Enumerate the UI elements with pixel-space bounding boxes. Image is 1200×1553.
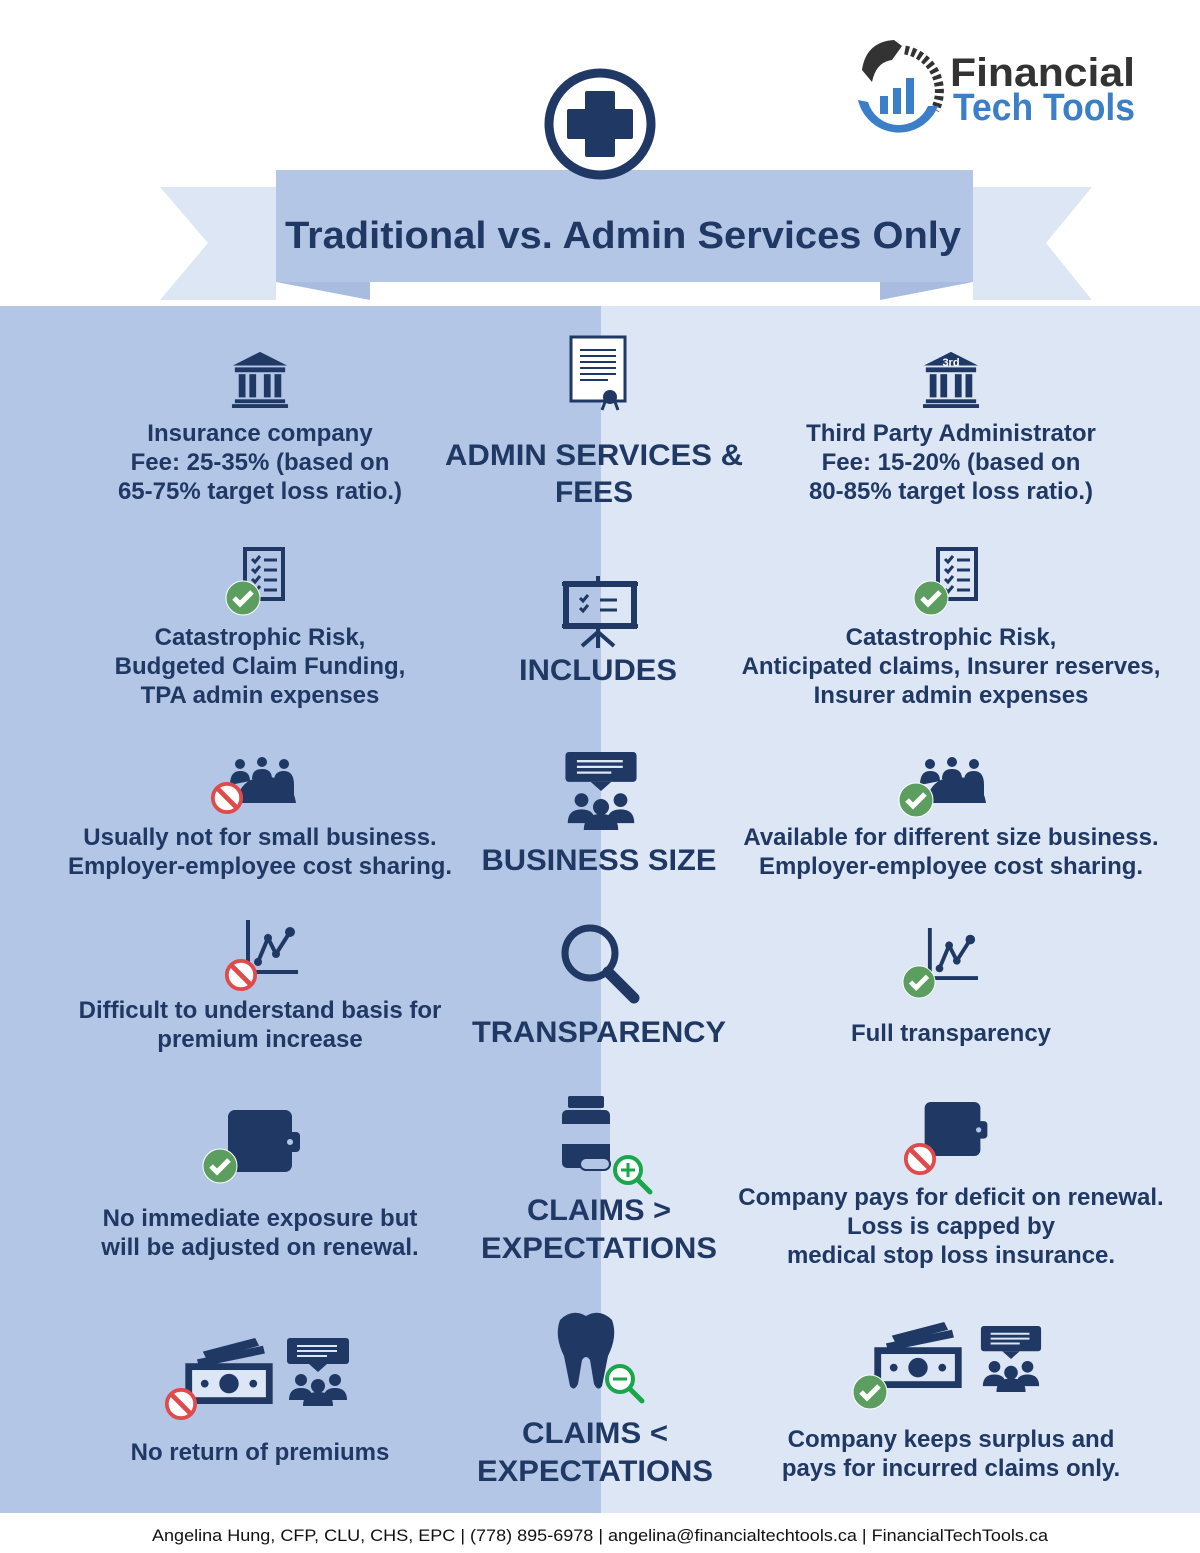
row 5: claims > expectations: Loss is capped by (847, 1213, 1056, 1240)
row 4: transparency (79, 920, 1052, 1053)
row 1: admin services & fees: Fee: 25-35% (based on (131, 449, 389, 476)
row 3: business size: Employer-employee cost sharing. (68, 853, 452, 880)
row 1: admin services & fees: FEES (555, 476, 633, 509)
row 2: includes (115, 549, 1160, 709)
footer: Angelina Hung, CFP, CLU, CHS, EPC | (778) 895-6978 | angelina@financialtechtools.ca | FinancialTechTools.ca (152, 1526, 1049, 1545)
logo (858, 40, 1135, 133)
row 4: transparency: Difficult to understand basis for (79, 997, 441, 1024)
row 6: claims < expectations: No return of premiums (131, 1439, 389, 1466)
row 5: claims > expectations (100, 1096, 1164, 1269)
row 2: includes: Budgeted Claim Funding, (115, 653, 405, 680)
row 3: business size: Available for different size business. (743, 824, 1159, 851)
row 6: claims < expectations: EXPECTATIONS (477, 1455, 713, 1488)
icon: medical plus (549, 73, 651, 175)
row 2: includes: Insurer admin expenses (814, 682, 1088, 709)
row 3: business size (68, 752, 1159, 880)
logo: Financial (950, 51, 1135, 95)
row 4: transparency: premium increase (157, 1026, 363, 1053)
row 1: admin services & fees (118, 337, 1096, 509)
row 3: business size: Usually not for small business. (83, 824, 437, 851)
row 1: admin services & fees: 65-75% target loss ratio.) (118, 478, 402, 505)
title ribbon (160, 170, 1092, 300)
row 4: transparency: TRANSPARENCY (472, 1016, 726, 1049)
logo: Tech Tools (953, 87, 1135, 129)
panel backgrounds (0, 306, 1200, 1513)
row 5: claims > expectations: No immediate exposure but (103, 1205, 417, 1232)
row 4: transparency: Full transparency (851, 1020, 1052, 1047)
row 2: includes: Catastrophic Risk, (155, 624, 365, 651)
row 3: business size: BUSINESS SIZE (482, 844, 716, 877)
title ribbon: Traditional vs. Admin Services Only (285, 215, 961, 257)
row 5: claims > expectations: will be adjusted on renewal. (100, 1234, 419, 1261)
row 2: includes: Anticipated claims, Insurer reserves, (742, 653, 1160, 680)
row 6: claims < expectations: CLAIMS < (522, 1417, 668, 1450)
row 6: claims < expectations: pays for incurred claims only. (782, 1455, 1120, 1482)
row 1: admin services & fees: Insurance company (147, 420, 373, 447)
row 6: claims < expectations: Company keeps surplus and (788, 1426, 1114, 1453)
row 5: claims > expectations: CLAIMS > (527, 1194, 671, 1227)
row 1: admin services & fees: Fee: 15-20% (based on (822, 449, 1080, 476)
row 5: claims > expectations: medical stop loss insurance. (787, 1242, 1115, 1269)
row 2: includes: TPA admin expenses (141, 682, 379, 709)
row 6: claims < expectations (131, 1313, 1120, 1488)
row 2: includes: INCLUDES (519, 654, 677, 687)
row 3: business size: Employer-employee cost sharing. (759, 853, 1143, 880)
row 1: admin services & fees: 3rd (942, 357, 960, 369)
row 1: admin services & fees: ADMIN SERVICES & (445, 439, 743, 472)
row 1: admin services & fees: Third Party Administrator (806, 420, 1096, 447)
row 5: claims > expectations: EXPECTATIONS (481, 1232, 717, 1265)
row 1: admin services & fees: 80-85% target loss ratio.) (809, 478, 1093, 505)
row 5: claims > expectations: Company pays for deficit on renewal. (738, 1184, 1164, 1211)
row 2: includes: Catastrophic Risk, (846, 624, 1056, 651)
